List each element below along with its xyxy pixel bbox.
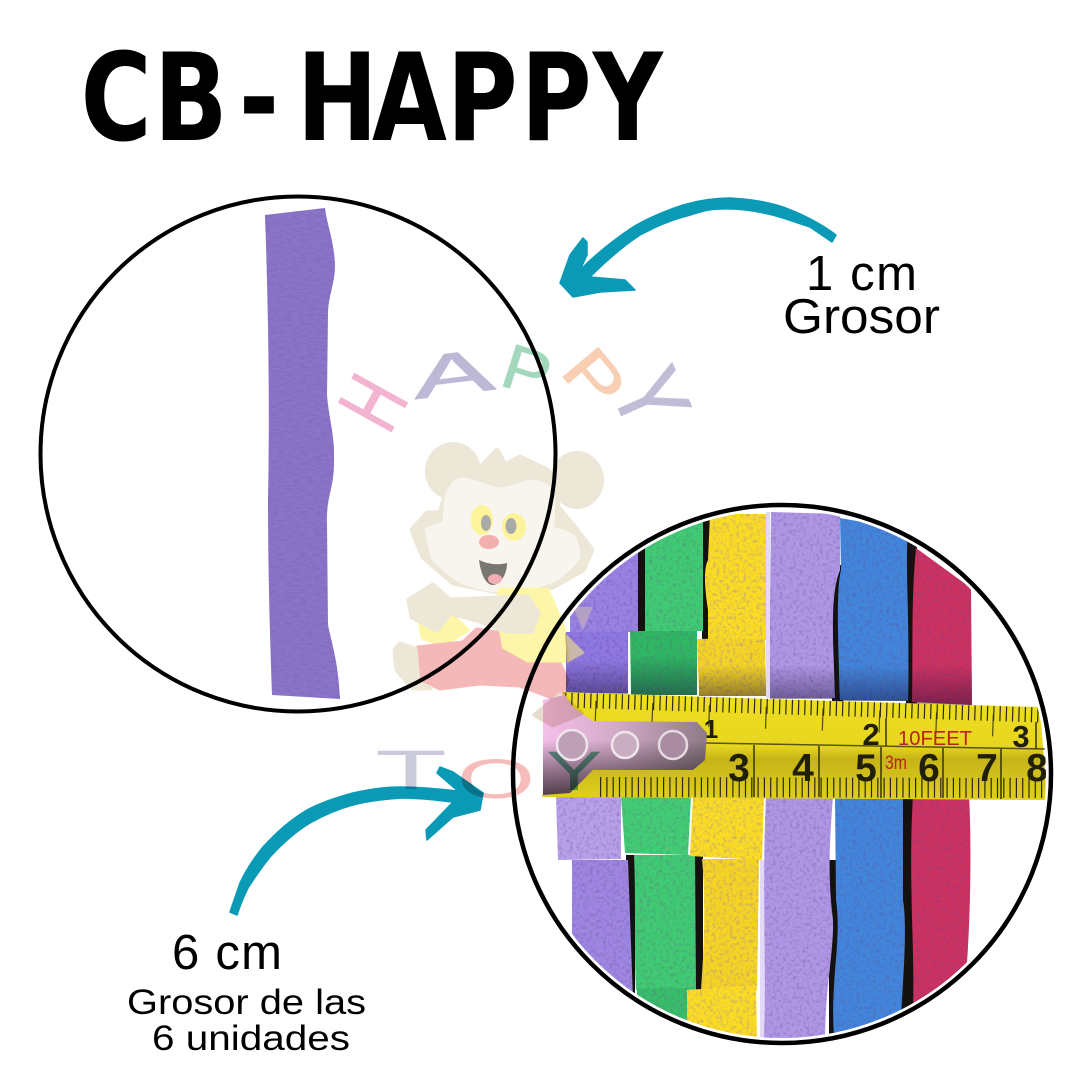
label: 1 cm thickness [783,247,940,344]
inch numbers: 5 [855,747,877,790]
upper strips [570,545,638,632]
inch numbers: 3 [1012,719,1030,754]
watermark word TOY: Y [546,740,602,803]
photo of foam strips with tape [542,512,1048,1040]
arrow: to single strip [560,198,836,297]
vest [420,617,467,645]
eyes [471,505,493,535]
red tape labels [886,731,972,769]
tape ticks top [565,700,1040,715]
label: 6 cm thickness of 6 units [127,926,366,1058]
watermark word HAPPY: P [547,333,641,424]
inch divider ticks [754,718,1036,799]
label: 6 cm thickness of 6 units: Grosor de las [127,983,366,1022]
watermark word TOY: T [375,739,447,801]
red tape labels: 3m [885,753,907,774]
dark gaps between strips [626,520,917,1040]
label: 6 cm thickness of 6 units: 6 cm [172,926,282,980]
face [427,480,578,590]
watermark word TOY [375,739,602,810]
circle outline [40,196,556,712]
hamster mascot [395,442,604,725]
lower strips [572,860,633,1000]
watermark word HAPPY: A [409,336,499,412]
watermark word TOY: O [457,748,535,810]
inch numbers: 8 [1026,747,1048,790]
feet [395,644,430,688]
inch numbers: 1 [704,714,718,744]
watermark word HAPPY [319,331,712,445]
inch numbers: 3 [728,747,750,790]
ears [425,442,481,500]
foam strips [556,512,972,1040]
purple foam strip [265,208,340,699]
watermark: Happy Toy logo [319,331,712,810]
tape ticks bottom [600,787,1046,788]
nose [479,535,499,549]
tape shadows on strips [566,655,972,705]
inch numbers: 6 [918,747,940,790]
mouth [479,560,507,585]
inch numbers: 7 [976,747,998,790]
label: 1 cm thickness: 1 cm [806,247,917,301]
title: CB-HAPPY [81,27,664,169]
arm [409,585,538,631]
head fur [412,450,592,593]
panel: six strips photo circle [127,198,1051,1058]
inch numbers: 4 [792,747,814,790]
lilac edge lines [760,512,770,1040]
watermark word HAPPY: Y [590,353,712,444]
metal hook [543,695,707,795]
panel: single strip circle [40,196,556,712]
label: 1 cm thickness: Grosor [783,290,940,344]
label: 6 cm thickness of 6 units: 6 unidades [152,1019,350,1058]
inch numbers: 2 [862,717,880,752]
circle outline [513,505,1051,1043]
arrow: to six strips photo [230,767,483,915]
tan tape fragments on purple strip [565,607,593,663]
watermark word HAPPY: H [319,360,426,445]
pants [418,630,567,700]
measuring tape [542,692,1048,800]
inch numbers [706,720,1046,782]
red tape labels: 10FEET [898,728,972,750]
watermark word HAPPY: P [493,331,560,412]
